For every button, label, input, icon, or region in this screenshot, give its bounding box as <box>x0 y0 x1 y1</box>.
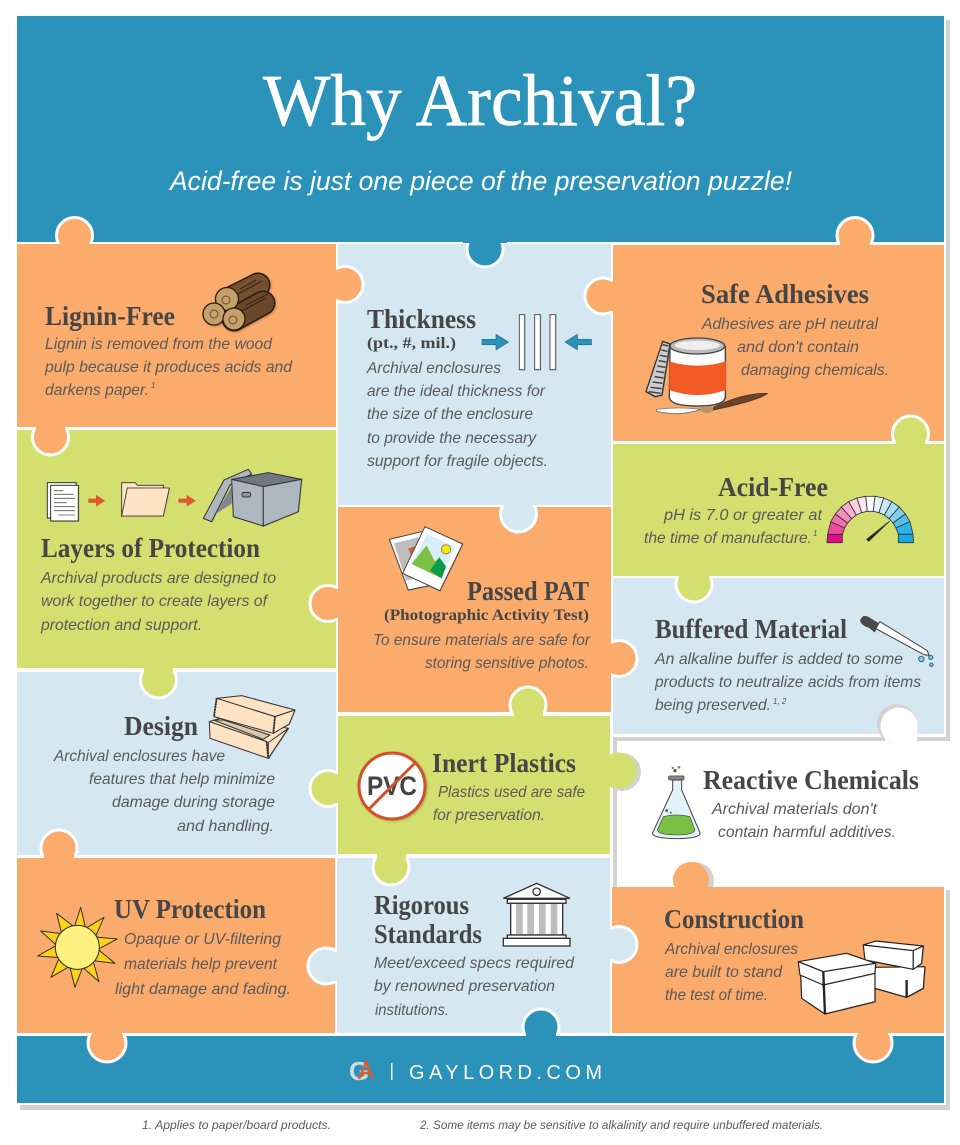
panel: Passed PAT <box>338 507 611 712</box>
panel: Reactive Chemicals <box>617 741 944 887</box>
text: Rigorous body: Meet/exceed specs required <box>374 955 575 972</box>
heading: Reactive Chemicals: Reactive Chemicals <box>703 765 919 795</box>
text: Layers body <box>40 570 276 634</box>
text: Lignin-Free body: Lignin is removed from the wood <box>45 336 273 353</box>
text: Inert body: Plastics used are safe <box>438 784 585 801</box>
text: Design body: features that help minimize <box>89 771 275 788</box>
text: PAT body <box>373 632 591 672</box>
text: UV body: Opaque or UV-filtering <box>124 931 281 948</box>
text: Design body: and handling. <box>177 818 274 835</box>
text: Lignin-Free body <box>44 336 293 399</box>
panel: Safe Adhesives <box>613 245 944 441</box>
text: Construction body <box>664 941 798 1004</box>
icon: sun <box>38 907 117 987</box>
text: Thickness body: are the ideal thickness for <box>367 383 546 400</box>
heading: Rigorous Standards: Standards <box>374 919 482 949</box>
text: Acid-Free body: pH is 7.0 or greater at <box>663 507 823 524</box>
text: Rigorous body: by renowned preservation <box>374 978 555 995</box>
text: Safe Adhesives body: and don't contain <box>737 339 859 356</box>
panel: header <box>168 60 792 196</box>
text: Design body <box>53 748 275 835</box>
text: Rigorous body: institutions. <box>375 1002 449 1019</box>
panel: Rigorous Standards <box>337 858 610 1033</box>
heading: Construction: Construction <box>664 904 804 934</box>
text: PAT body: To ensure materials are safe for <box>373 632 591 649</box>
panel: Thickness <box>338 244 611 505</box>
text: Buffered body: being preserved. <box>655 697 771 714</box>
footnotes: 1. Applies to paper/board products. <box>142 1118 331 1132</box>
text: Reactive body: contain harmful additives. <box>718 824 896 841</box>
panel: Acid-Free <box>613 444 944 576</box>
text: Lignin-Free body: darkens paper. <box>45 382 149 399</box>
text: UV body: materials help prevent <box>124 956 278 973</box>
heading: Rigorous Standards <box>374 890 482 949</box>
text: Buffered body: 1, 2 <box>773 697 787 706</box>
text: UV body: light damage and fading. <box>115 981 291 998</box>
icon: stacked boxes <box>798 941 925 1014</box>
icon: temple <box>503 883 570 946</box>
panel: Buffered Material <box>613 578 944 734</box>
text: Design body: Archival enclosures have <box>53 748 225 765</box>
text: Acid-Free body: the time of manufacture. <box>644 530 812 547</box>
text: Safe Adhesives body <box>701 316 889 379</box>
heading: Lignin-Free: Lignin-Free <box>45 301 175 331</box>
text: Buffered body: products to neutralize acids from items <box>654 674 921 691</box>
footnotes <box>142 1118 823 1132</box>
text: Safe Adhesives body: Adhesives are pH neutral <box>701 316 878 333</box>
heading: Rigorous Standards: Rigorous <box>374 890 469 920</box>
heading: Buffered Material: Buffered Material <box>655 614 847 644</box>
subheading: Photographic Activity Test: (Photographic Activity Test) <box>384 607 589 624</box>
panel: Layers of Protection <box>17 430 336 668</box>
text: Layers body: work together to create layers of <box>41 593 269 610</box>
heading: Thickness: Thickness <box>367 304 476 334</box>
text: Acid-Free body <box>644 507 823 547</box>
text: Thickness body: the size of the enclosure <box>367 406 533 423</box>
text: Thickness body <box>366 360 548 470</box>
panel: UV Protection <box>17 858 335 1033</box>
panel: Design <box>17 672 336 855</box>
text: Lignin-Free body: 1 <box>151 381 155 390</box>
icon: photographs <box>389 527 463 591</box>
text: Inert body <box>433 784 585 824</box>
heading: Design: Design <box>124 711 198 741</box>
icon: pH gauge <box>827 496 914 543</box>
heading: Safe Adhesives: Safe Adhesives <box>701 279 869 309</box>
icon: no PVC: PVC <box>367 771 417 801</box>
text: Buffered body: An alkaline buffer is added to some <box>654 651 903 668</box>
icon: dropper <box>860 616 933 666</box>
subheading: units: (pt., #, mil.) <box>367 335 456 352</box>
text: Buffered body <box>654 651 921 714</box>
text: Layers body: Archival products are designed to <box>40 570 276 587</box>
icon: flask <box>653 766 700 839</box>
text: Rigorous body <box>374 955 575 1019</box>
footnotes: 2. Some items may be sensitive to alkalinity and require unbuffered materials. <box>419 1118 823 1132</box>
icon: adhesive jar and brush <box>646 338 767 414</box>
panel: Lignin-Free <box>17 244 336 427</box>
text: Thickness body: support for fragile objects. <box>367 453 548 470</box>
text: Lignin-Free body: pulp because it produces acids and <box>44 359 293 376</box>
icon: GA logo: G <box>349 1056 369 1086</box>
text: Inert body: for preservation. <box>433 807 545 824</box>
text: Layers body: protection and support. <box>40 617 202 634</box>
heading: Passed PAT: Passed PAT <box>467 576 589 606</box>
footer: Gaylord logo and URL <box>349 1056 602 1086</box>
text: PAT body: storing sensitive photos. <box>425 655 589 672</box>
text: GAYLORD.COM: GAYLORD.COM <box>409 1062 602 1084</box>
title: Why Archival? <box>263 60 697 141</box>
text: Construction body: the test of time. <box>665 987 768 1004</box>
icon: paper to folder to box sequence <box>47 469 302 526</box>
panel: Construction <box>612 887 944 1033</box>
text: UV body <box>115 931 291 998</box>
icon: open clamshell box <box>209 696 295 758</box>
icon: logs <box>203 280 268 330</box>
text: Thickness body: to provide the necessary <box>367 430 537 447</box>
heading: Layers of Protection: Layers of Protection <box>41 533 260 563</box>
text: Construction body: Archival enclosures <box>664 941 798 958</box>
text: Thickness body: Archival enclosures <box>366 360 501 377</box>
panel: Inert Plastics <box>338 716 610 854</box>
heading: Inert Plastics: Inert Plastics <box>432 748 576 778</box>
text: Construction body: are built to stand <box>665 964 783 981</box>
icon: thickness bars and arrows <box>482 315 591 370</box>
subtitle: Acid-free is just one piece of the preservation puzzle! <box>168 166 792 196</box>
text: Reactive body <box>711 801 896 841</box>
text: Acid-Free body: 1 <box>813 529 817 538</box>
heading: UV Protection: UV Protection <box>114 894 266 924</box>
text: Reactive body: Archival materials don't <box>711 801 878 818</box>
heading: Acid-Free: Acid-Free <box>718 472 828 502</box>
icon: no PVC <box>359 753 425 819</box>
text: Design body: damage during storage <box>112 794 275 811</box>
text: Safe Adhesives body: damaging chemicals. <box>741 362 889 379</box>
